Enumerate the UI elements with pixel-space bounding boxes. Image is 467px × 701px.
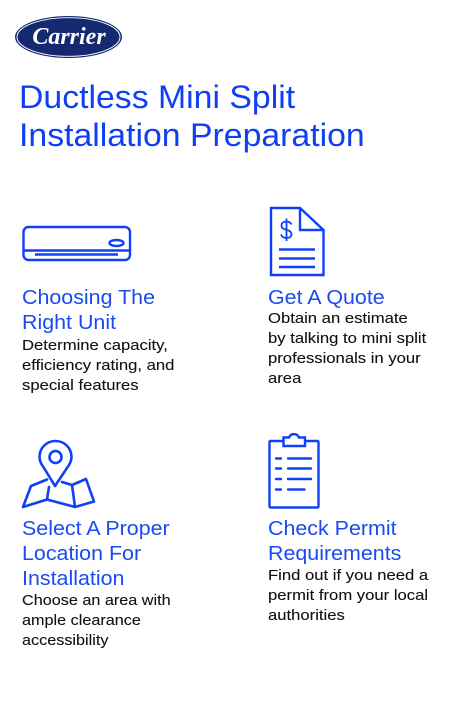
title: Installation Preparation xyxy=(19,117,365,153)
description: area xyxy=(268,370,301,387)
logo: Carrier xyxy=(15,16,122,58)
heading xyxy=(22,286,155,334)
heading xyxy=(22,517,170,590)
heading xyxy=(268,517,401,565)
description: permit from your local xyxy=(268,587,428,604)
logo: Carrier: Carrier xyxy=(32,24,106,50)
description: Obtain an estimate xyxy=(268,310,408,327)
description: Determine capacity, xyxy=(22,337,168,354)
description: special features xyxy=(22,377,139,394)
description: Find out if you need a xyxy=(268,567,428,584)
description: accessibility xyxy=(22,632,108,649)
icon: map with location pin xyxy=(22,440,96,508)
title xyxy=(19,79,365,153)
heading: Choosing The xyxy=(22,286,155,309)
description: ample clearance xyxy=(22,612,140,629)
heading and text: check permit requirements xyxy=(268,517,428,624)
heading and text: choosing the right unit xyxy=(22,286,174,394)
heading: Get A Quote xyxy=(268,286,385,309)
description xyxy=(22,337,174,394)
heading: Right Unit xyxy=(22,311,116,334)
description: authorities xyxy=(268,607,345,624)
description xyxy=(268,310,426,387)
description: by talking to mini split xyxy=(268,330,426,347)
description: professionals in your xyxy=(268,350,421,367)
description xyxy=(22,592,170,649)
description xyxy=(268,567,428,624)
heading: Check Permit xyxy=(268,517,397,540)
heading: Installation xyxy=(22,567,124,590)
heading: Location For xyxy=(22,542,141,565)
icon: quote document xyxy=(270,206,325,276)
description: efficiency rating, and xyxy=(22,357,174,374)
heading and text: select a proper location xyxy=(22,517,170,649)
heading and text: get a quote xyxy=(268,286,426,387)
icon: clipboard checklist xyxy=(268,432,320,509)
icon: air conditioner xyxy=(22,226,132,262)
title: Ductless Mini Split xyxy=(19,79,295,115)
description: Choose an area with xyxy=(22,592,170,609)
heading: Requirements xyxy=(268,542,401,565)
heading: Select A Proper xyxy=(22,517,169,540)
